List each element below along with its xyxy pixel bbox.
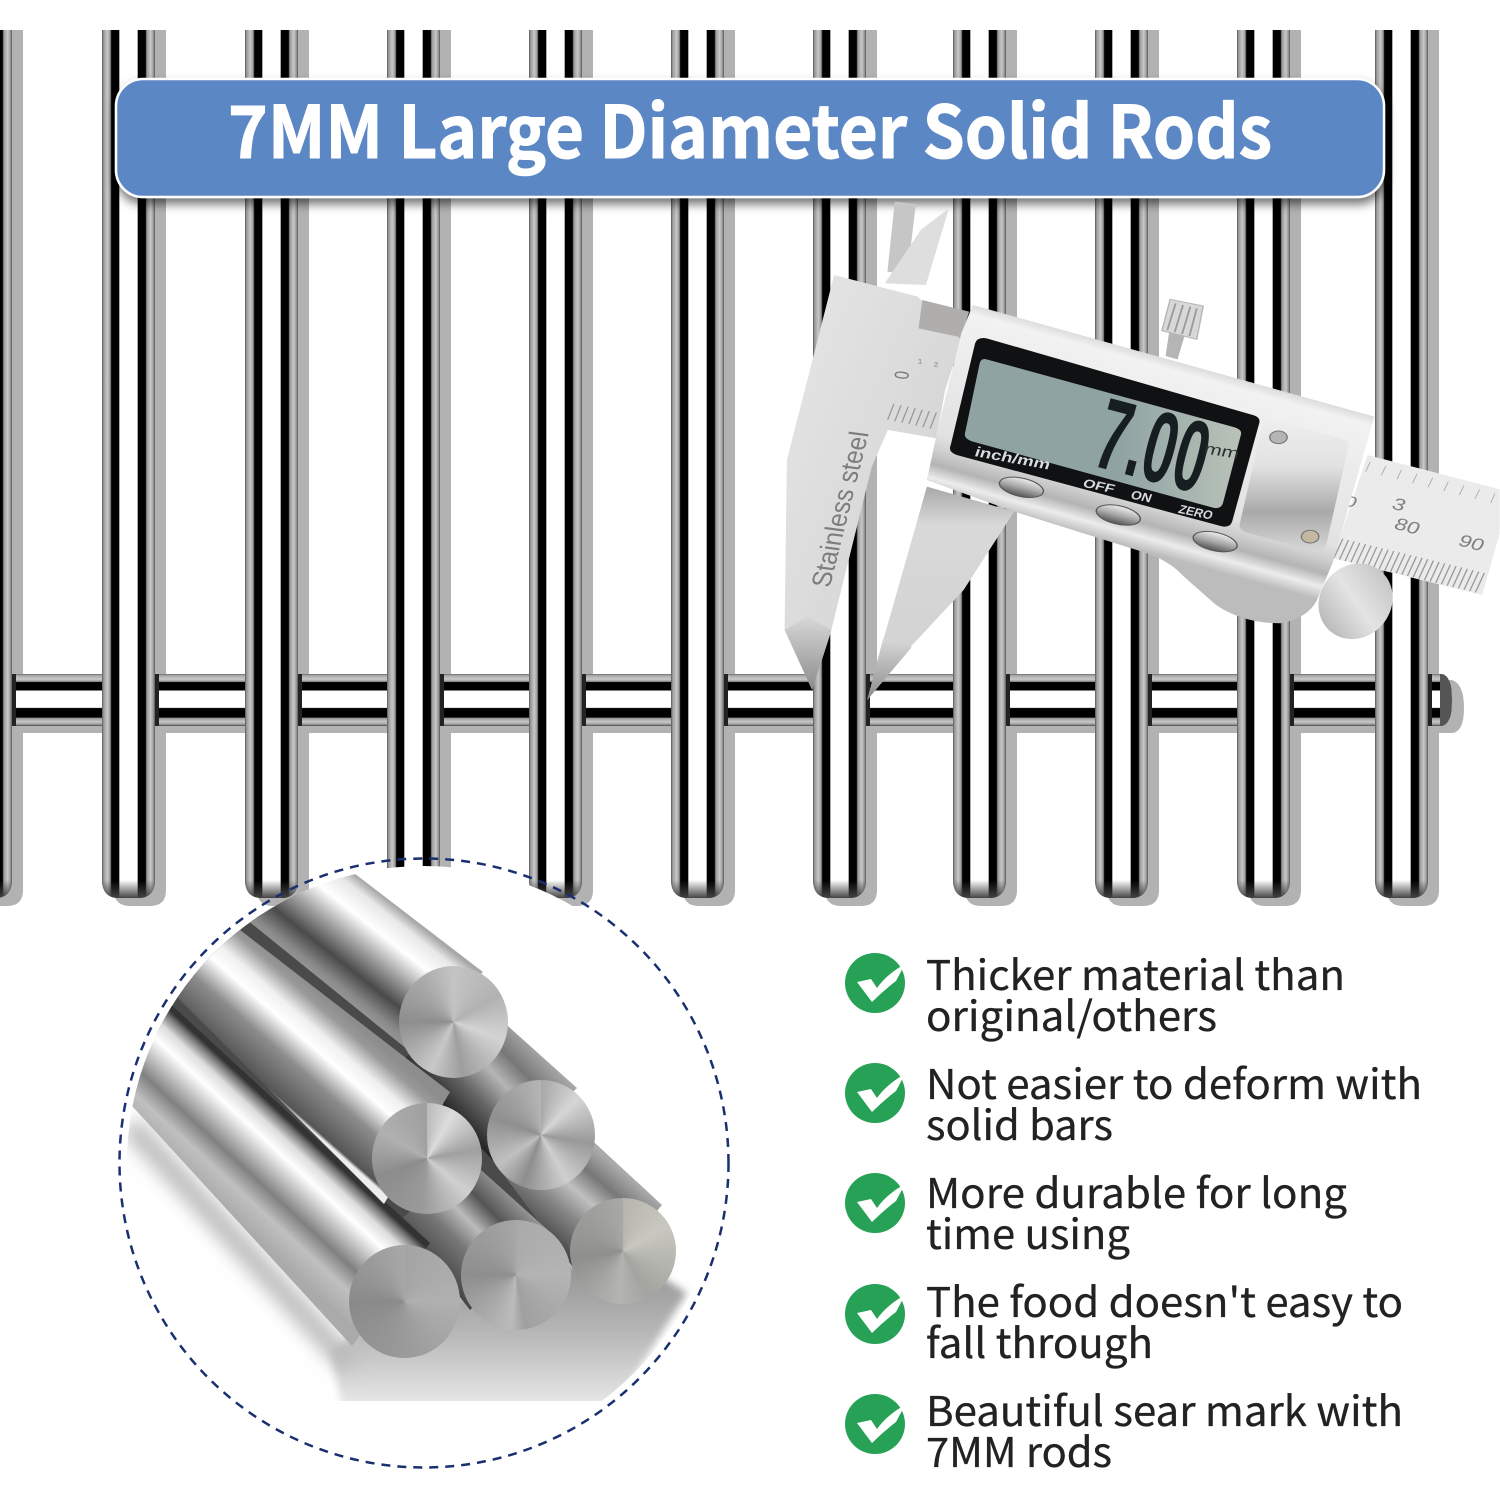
benefit 2 [845,1051,1422,1152]
right ruler [1333,455,1500,595]
grill grate background [0,30,1464,906]
locking screw [1162,299,1203,359]
rod shadows [0,30,1439,906]
benefit 5 [845,1378,1403,1479]
button labels: inch/mm [973,444,1053,473]
benefit 3: More durable for long [926,1160,1347,1220]
right ruler: 0 [1342,492,1361,511]
benefit 1: original/others [926,983,1217,1043]
rod F [132,1006,460,1358]
benefits list [845,942,1422,1479]
title banner [116,74,1384,197]
white circle backdrop [127,866,721,1460]
caliper photo [785,202,1500,700]
cross bar [12,674,1464,733]
benefit 1 [845,942,1345,1043]
ground shadow [330,1263,690,1401]
left ruler scale: 0 [890,369,914,381]
right ruler: 3 [1389,495,1409,515]
dark underlay between rods [157,894,540,1223]
upper jaws [885,202,949,285]
caliper photo: 7.00 [1085,377,1222,515]
unit mm: mm [1202,439,1242,462]
button labels: OFF [1081,477,1117,496]
rod A [250,874,508,1078]
metal side plate [1240,420,1349,552]
left ruler scale: 2 [934,361,938,368]
left ruler scale: 1 [918,358,922,365]
benefit 2: solid bars [926,1092,1113,1152]
rod E [400,1160,571,1330]
benefit 2: Not easier to deform with [926,1051,1422,1111]
left ruler scale [890,358,938,422]
fixed jaw [785,275,961,690]
LCD screen [965,359,1241,508]
dashed circle outline [120,858,728,1468]
benefit 4: fall through [926,1310,1153,1370]
lower left soft shadow [130,1125,350,1365]
benefit 5: Beautiful sear mark with [926,1378,1403,1438]
caliper body [927,305,1374,623]
rod C [178,930,482,1214]
rods [0,30,1432,898]
button labels: ZERO [1176,503,1215,523]
right ruler: 80 [1391,515,1423,539]
benefit 1: Thicker material than [926,942,1345,1002]
right ruler: 90 [1455,532,1488,555]
steel rods stack [100,847,720,1441]
button labels: ON [1128,489,1154,506]
benefit 4 [845,1269,1403,1370]
moving jaw [867,487,1014,700]
moving jaw tip [867,638,912,700]
stainless steel engraving: Stainless steel [806,429,876,589]
benefit 5: 7MM rods [926,1419,1112,1479]
buttons [996,473,1241,556]
benefit 4: The food doesn't easy to [926,1269,1403,1329]
rods photo in dashed circle [100,847,728,1468]
slider block [919,300,969,337]
rod B [405,1026,595,1190]
benefit 3 [845,1160,1347,1261]
button labels [973,444,1215,523]
thumb wheel [1312,560,1399,643]
rod D [503,1142,676,1304]
title text: 7MM Large Diameter Solid Rods [228,74,1272,179]
fixed jaw tip [785,617,831,690]
benefit 3: time using [926,1201,1130,1261]
display bezel [950,338,1260,527]
